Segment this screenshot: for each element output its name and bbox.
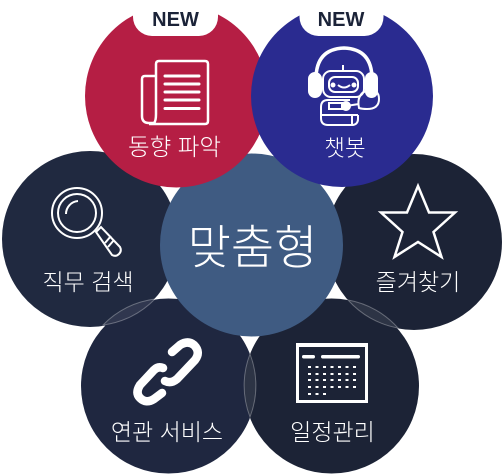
icon: newspaper: [142, 61, 208, 124]
icon: chain link: [138, 342, 198, 401]
label: favorites: 즐겨찾기: [376, 269, 460, 295]
label: customized: 맞춤형: [188, 221, 317, 274]
panel: job search: [2, 151, 178, 327]
badge: new: [300, 0, 384, 36]
badge: new: NEW: [152, 9, 199, 31]
panel: schedule management: [244, 298, 419, 474]
panel: center customized: [160, 154, 343, 336]
label: related services: 연관 서비스: [111, 419, 223, 445]
label: schedule management: 일정관리: [290, 419, 375, 445]
panel: chatbot: [251, 0, 433, 187]
label: trend analysis: 동향 파악: [128, 134, 221, 160]
label: job search: 직무 검색: [42, 269, 134, 295]
badge: new: NEW: [318, 9, 364, 31]
panel: related services: [81, 298, 256, 474]
icon: calendar: [296, 343, 368, 403]
label: chatbot: 챗봇: [324, 136, 366, 161]
icon: robot with headset: [309, 48, 379, 125]
icon: star: [381, 186, 455, 257]
icon: magnifying glass: [52, 188, 121, 256]
badge: new: [133, 0, 218, 36]
decorative overlaps: [103, 299, 398, 417]
panel: favorites: [326, 154, 502, 330]
panel: trend analysis: [85, 0, 268, 188]
